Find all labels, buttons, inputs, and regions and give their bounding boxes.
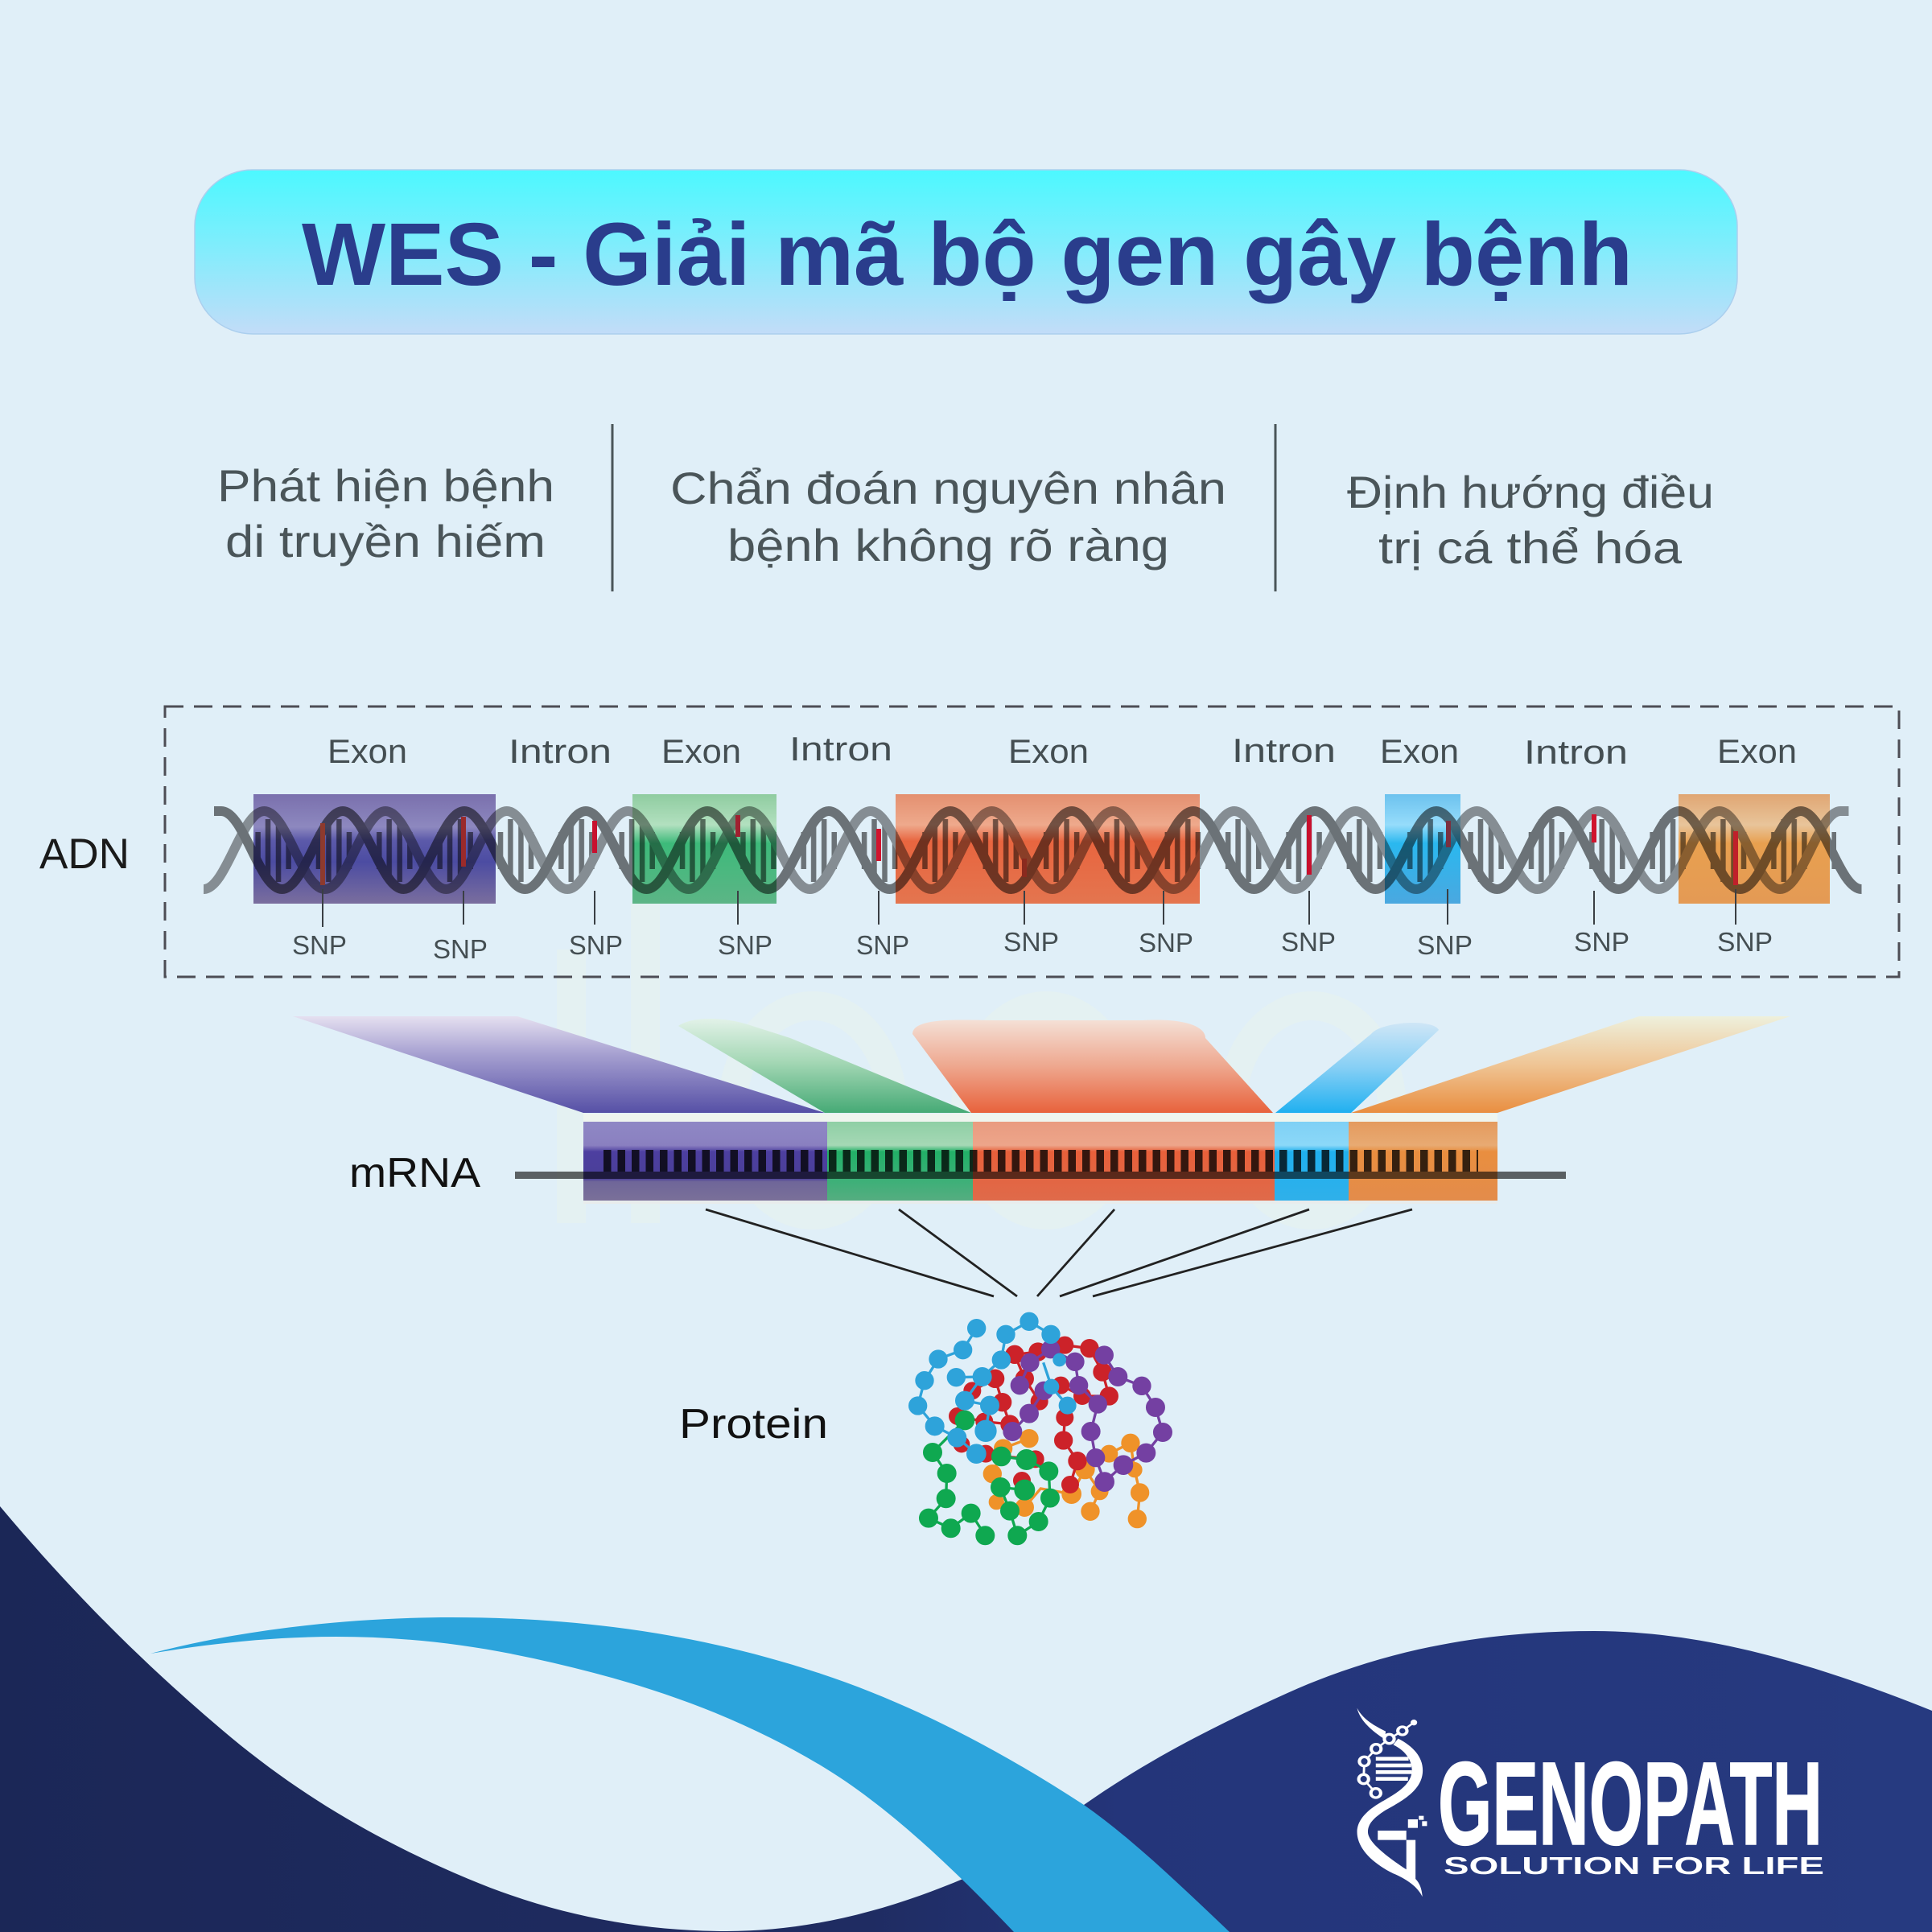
benefit: diagnosing unclear causes [670, 463, 1226, 571]
SNP labels: SNP [1574, 927, 1629, 957]
splicing ribbons from exons to mRNA [293, 1016, 1790, 1113]
SNP labels: SNP [569, 930, 623, 960]
icon: DNA helix logo mark [1357, 1708, 1427, 1897]
exon and intron labels: Exon [327, 732, 407, 770]
icon: folded protein [909, 1313, 1172, 1544]
translation lines converging on protein [706, 1209, 1412, 1296]
benefit: personalised treatment [1347, 467, 1714, 573]
title text: WES - Giải mã bộ gen gây bệnh [302, 205, 1633, 304]
SNP labels: SNP [1717, 927, 1773, 957]
SNP labels: SNP [1417, 930, 1473, 960]
mRNA segments [583, 1122, 1497, 1201]
benefit: diagnosing unclear causes: bệnh không rõ ràng [727, 520, 1169, 571]
mRNA strip [515, 1114, 1566, 1204]
SNP labels: SNP [1139, 928, 1193, 958]
SNP labels: SNP [1003, 927, 1059, 957]
benefit: rare genetic disease detection [217, 460, 554, 566]
Genopath logo [1357, 1708, 1824, 1897]
exon and intron labels [327, 730, 1797, 771]
panel: DNA diagram [165, 706, 1899, 977]
exon and intron labels: Intron [1524, 733, 1628, 771]
benefit: personalised treatment: Định hướng điều [1347, 467, 1714, 517]
mRNA backbone and comb [515, 1150, 1566, 1179]
exon colour blocks [253, 794, 1830, 904]
benefit: personalised treatment: trị cá thể hóa [1378, 522, 1683, 573]
DNA double helix [204, 811, 1862, 889]
SNP labels [292, 927, 1773, 964]
benefit: rare genetic disease detection: Phát hiện bệnh [217, 460, 554, 511]
dashed frame [165, 706, 1899, 977]
pale strip above mRNA [583, 1114, 1497, 1122]
label: mRNA: mRNA [349, 1150, 480, 1197]
benefit: rare genetic disease detection: di truyền hiếm [225, 516, 546, 566]
pale strip below mRNA [583, 1201, 1497, 1204]
logo tagline: SOLUTION FOR LIFE [1444, 1852, 1824, 1880]
exon and intron labels: Intron [789, 730, 892, 768]
benefit: diagnosing unclear causes: Chẩn đoán nguyên nhân [670, 463, 1226, 513]
label: Protein: Protein [679, 1401, 828, 1448]
SNP leader lines [323, 889, 1736, 927]
divider two [1275, 424, 1276, 591]
exon and intron labels: Exon [1717, 732, 1797, 770]
SNP labels: SNP [1281, 927, 1336, 957]
blue swoosh band [150, 1617, 1230, 1932]
SNP labels: SNP [292, 930, 347, 960]
divider one [612, 424, 613, 591]
label: ADN: ADN [39, 830, 130, 878]
exon and intron labels: Intron [509, 732, 612, 770]
SNP labels: SNP [433, 934, 488, 964]
exon and intron labels: Intron [1232, 731, 1336, 769]
exon and intron labels: Exon [661, 732, 741, 770]
SNP labels: SNP [718, 930, 772, 960]
exon and intron labels: Exon [1008, 732, 1089, 770]
faint watermark behind mRNA [571, 904, 1392, 1223]
exon and intron labels: Exon [1380, 732, 1459, 770]
navy wave at the bottom [0, 1506, 1932, 1932]
SNP labels: SNP [856, 930, 909, 960]
title banner [195, 170, 1737, 334]
red SNP markers [323, 814, 1736, 885]
